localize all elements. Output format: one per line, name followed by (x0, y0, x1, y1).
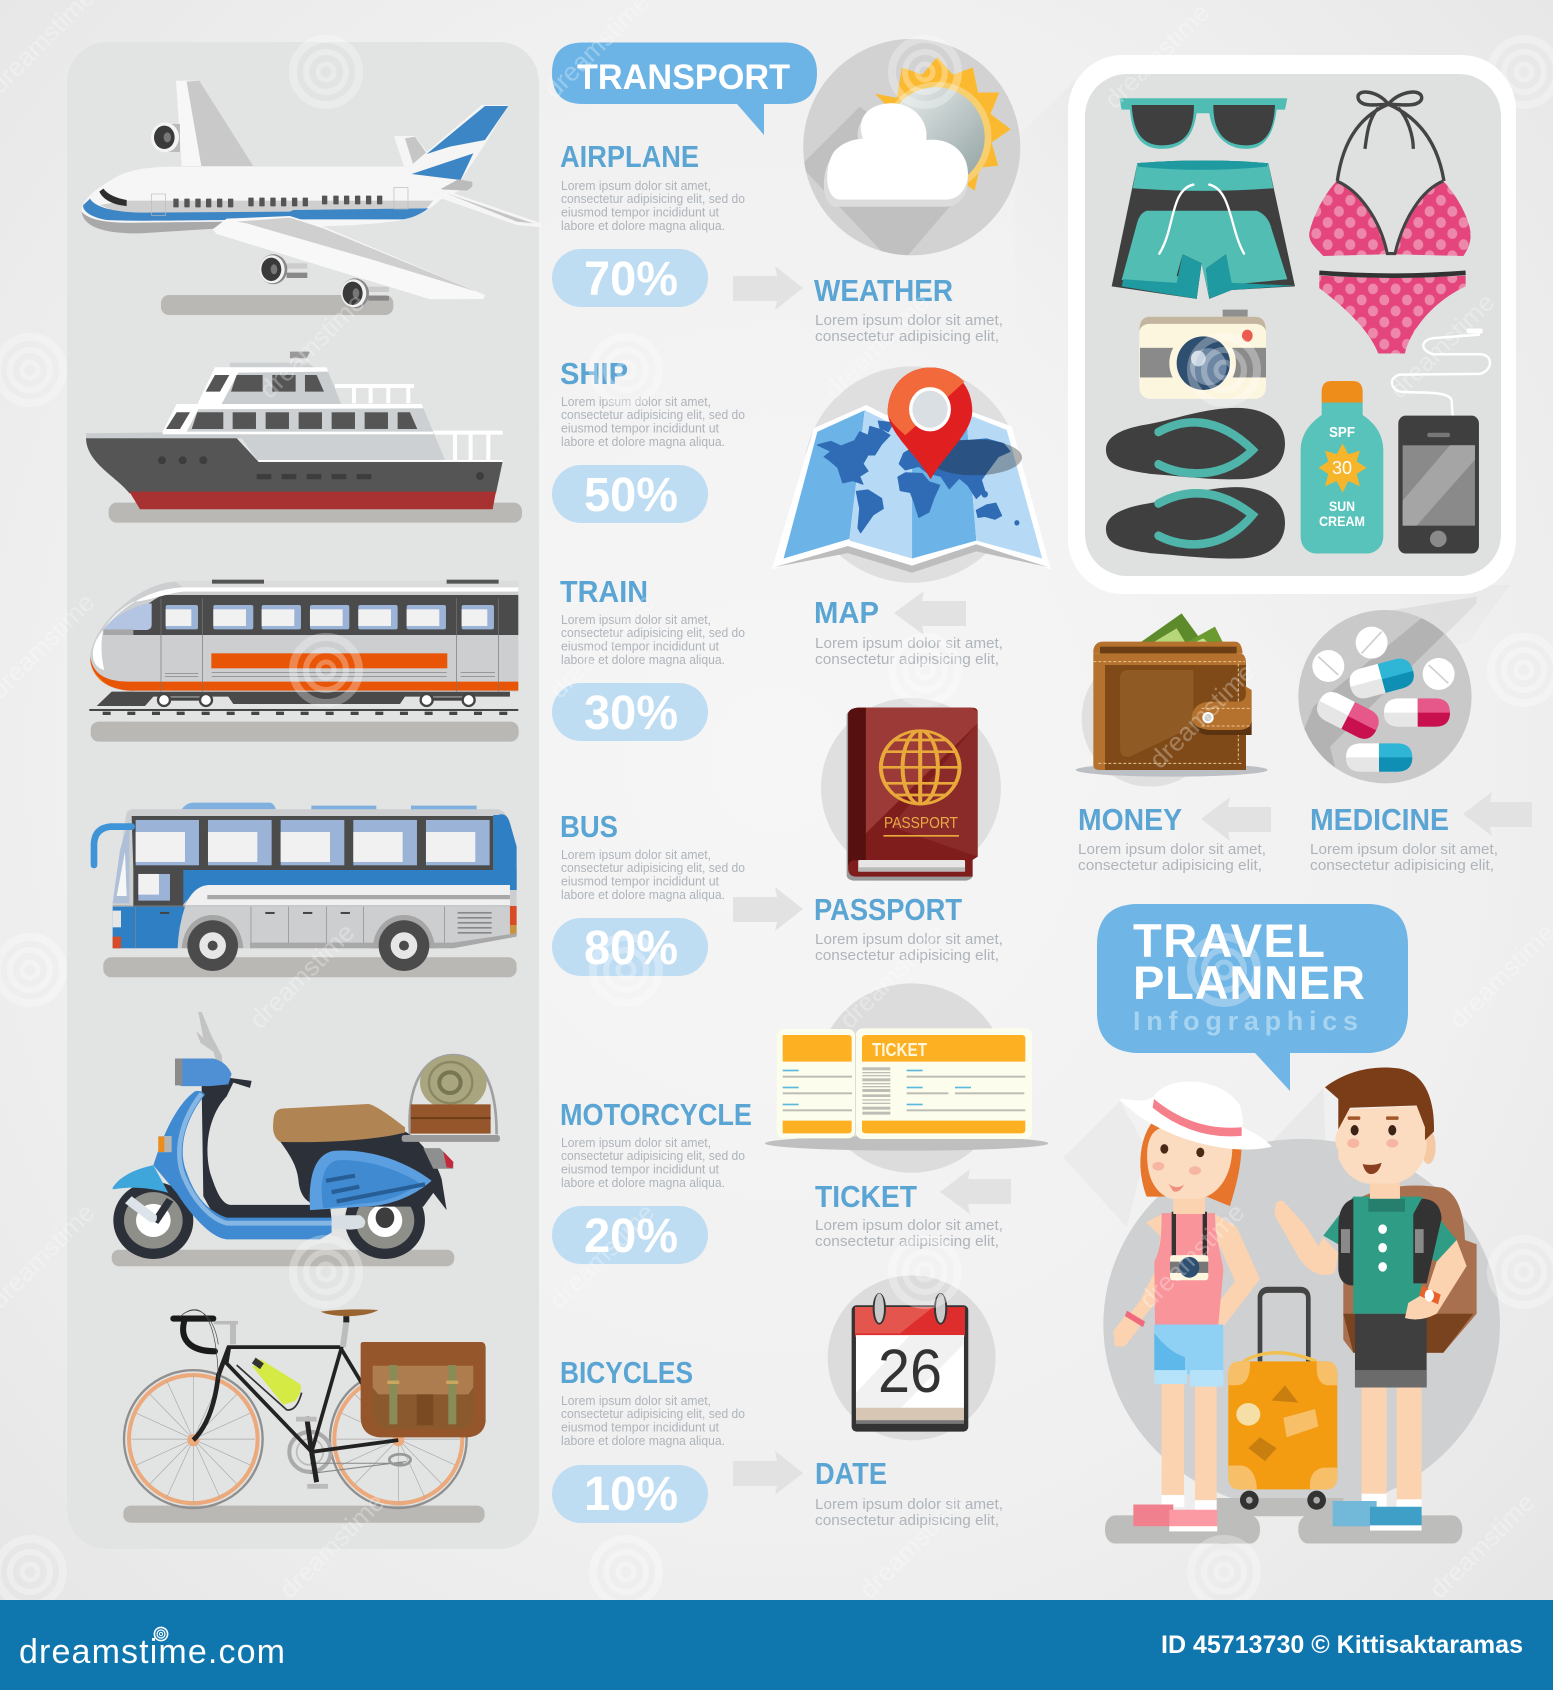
transport item: bicycles text: Lorem ipsum dolor sit amet, (561, 1394, 711, 1408)
label: medicine: MEDICINE (1310, 802, 1449, 837)
transport item: ship text: eiusmod tempor incididunt ut (561, 422, 720, 436)
transport item: ship text: labore et dolore magna aliqua. (561, 435, 725, 449)
watermark text: dreamstime (818, 287, 935, 404)
icon: map (772, 366, 1051, 583)
long shadow: packing box (1015, 80, 1510, 700)
transport item: train text: TRAIN (560, 574, 648, 609)
transport item: train text: eiusmod tempor incididunt ut (561, 640, 720, 654)
title: travel planner bubble: TRAVEL (1133, 914, 1325, 967)
transport item: bicycles text: consectetur adipisicing elit, sed do (561, 1407, 745, 1421)
vehicle: airplane (82, 81, 542, 315)
transport item: train text: Lorem ipsum dolor sit amet, (561, 613, 711, 627)
transport item: bus text: labore et dolore magna aliqua. (561, 888, 725, 902)
transport item: motorcycle text: 20% (584, 1210, 678, 1263)
label: medicine: consectetur adipisicing elit, (1310, 857, 1494, 874)
watermark text: dreamstime (1423, 1487, 1540, 1604)
item: sun cream: SUN (1329, 498, 1355, 514)
item: camera (1139, 310, 1266, 399)
title: travel planner bubble (1097, 904, 1408, 1091)
label: money: Lorem ipsum dolor sit amet, (1078, 841, 1266, 858)
transport item: bus text (552, 809, 745, 976)
transport item: bus text: BUS (560, 809, 618, 844)
transport item: train text: labore et dolore magna aliqua. (561, 653, 725, 667)
arrow: airplane to weather (733, 266, 803, 310)
illustration: travelers (1063, 1068, 1500, 1544)
watermark text: dreamstime (543, 1197, 660, 1314)
transport item: motorcycle text (552, 1097, 752, 1264)
item: sun cream: SPF (1329, 424, 1355, 441)
object: suitcase (1228, 1290, 1337, 1510)
watermark text: dreamstime (853, 1487, 970, 1604)
item: sunglasses (1119, 98, 1287, 149)
transport item: airplane text: AIRPLANE (560, 139, 699, 174)
label: ticket: Lorem ipsum dolor sit amet, (815, 1217, 1003, 1234)
watermark text: dreamstime (1133, 1197, 1250, 1314)
transport item: bicycles text: BICYCLES (560, 1355, 693, 1390)
transport item: ship text: SHIP (560, 356, 628, 391)
vehicle: ship (86, 352, 522, 523)
label: ticket: consectetur adipisicing elit, (815, 1233, 999, 1250)
transport item: airplane text: labore et dolore magna aliqua. (561, 219, 725, 233)
icon: calendar date (828, 1275, 996, 1440)
transport item: bicycles text: eiusmod tempor incididunt ut (561, 1420, 720, 1434)
transport item: airplane text (552, 139, 745, 307)
item: sun cream (1301, 381, 1383, 554)
label: ticket: TICKET (815, 1179, 917, 1214)
footer banner (0, 1600, 1553, 1690)
watermark text: dreamstime (1383, 287, 1500, 404)
transport item: airplane text: eiusmod tempor incididunt ut (561, 206, 720, 220)
transport item: motorcycle text: MOTORCYCLE (560, 1097, 752, 1132)
arrow: ticket (940, 1169, 1011, 1214)
icon: calendar date: 26 (878, 1337, 942, 1405)
icon: passport (821, 698, 1001, 881)
label: medicine (1310, 802, 1498, 874)
icon: passport: PASSPORT (884, 815, 958, 832)
label: medicine: Lorem ipsum dolor sit amet, (1310, 841, 1498, 858)
item: bikini (1309, 92, 1471, 354)
transport item: airplane text: 70% (584, 253, 678, 306)
footer banner: ID 45713730 © Kittisaktaramas (1161, 1631, 1523, 1659)
icon: ticket (765, 983, 1048, 1173)
item: phone (1392, 329, 1490, 554)
label: passport: consectetur adipisicing elit, (815, 947, 999, 964)
watermark text: dreamstime (833, 917, 950, 1034)
label: date: consectetur adipisicing elit, (815, 1512, 999, 1529)
item: flip flops (1106, 408, 1285, 559)
watermark text: dreamstime (273, 1487, 390, 1604)
label: ticket (815, 1179, 1003, 1250)
transport item: bus text: eiusmod tempor incididunt ut (561, 874, 720, 888)
character: man (1275, 1068, 1477, 1531)
label: date (815, 1456, 1003, 1529)
arrow: bicycles to date (733, 1451, 803, 1495)
label: money: consectetur adipisicing elit, (1078, 857, 1262, 874)
transport item: ship text: consectetur adipisicing elit, sed do (561, 408, 745, 422)
label: passport (814, 892, 1003, 964)
heading: transport bubble (552, 42, 817, 135)
transport item: train text: consectetur adipisicing elit, sed do (561, 626, 745, 640)
title: travel planner bubble: Infographics (1133, 1006, 1358, 1036)
transport item: ship text (552, 356, 745, 523)
transport item: bus text: Lorem ipsum dolor sit amet, (561, 848, 711, 862)
watermark text: dreamstime (1143, 657, 1260, 774)
label: date: DATE (815, 1456, 887, 1491)
title: travel planner bubble: PLANNER (1133, 956, 1365, 1009)
watermark text: dreamstime (543, 587, 660, 704)
vehicle: bus (94, 803, 517, 977)
label: date: Lorem ipsum dolor sit amet, (815, 1496, 1003, 1513)
item: sun cream: CREAM (1319, 513, 1365, 529)
footer banner: dreamstime.com (19, 1633, 285, 1671)
transport item: train text: 30% (584, 687, 678, 740)
panel: packing list box (1068, 55, 1516, 594)
label: weather: WEATHER (814, 273, 953, 308)
panel: transport vehicles (67, 42, 539, 1549)
transport item: bicycles text: labore et dolore magna aliqua. (561, 1434, 725, 1448)
label: map: MAP (814, 595, 879, 630)
item: sun cream: 30 (1332, 458, 1352, 478)
transport item: airplane text: Lorem ipsum dolor sit amet, (561, 179, 711, 193)
label: map: Lorem ipsum dolor sit amet, (815, 635, 1003, 652)
watermark text: dreamstime (253, 287, 370, 404)
watermark text: dreamstime (243, 917, 360, 1034)
transport item: motorcycle text: consectetur adipisicing elit, sed do (561, 1149, 745, 1163)
transport item: motorcycle text: Lorem ipsum dolor sit amet, (561, 1136, 711, 1150)
label: passport: PASSPORT (814, 892, 962, 927)
label: map (814, 595, 1003, 668)
icon: medicine (1298, 597, 1477, 787)
watermark text: dreamstime (1098, 0, 1215, 114)
transport item: motorcycle text: eiusmod tempor incididunt ut (561, 1162, 720, 1176)
item: swim shorts (1112, 161, 1295, 299)
transport item: bus text: 80% (584, 922, 678, 975)
transport item: ship text: 50% (584, 469, 678, 522)
transport item: bus text: consectetur adipisicing elit, sed do (561, 861, 745, 875)
vehicle: bicycle (123, 1309, 486, 1523)
icon: weather (800, 39, 1020, 259)
transport item: airplane text: consectetur adipisicing elit, sed do (561, 192, 745, 206)
label: weather: Lorem ipsum dolor sit amet, (815, 312, 1003, 329)
heading: transport bubble: TRANSPORT (577, 58, 790, 97)
transport item: bicycles text: 10% (584, 1468, 678, 1521)
arrow: bus to passport (733, 887, 803, 931)
vehicle: motorcycle (112, 1012, 500, 1266)
character: woman (1113, 1082, 1272, 1531)
transport item: train text (552, 574, 745, 741)
label: map: consectetur adipisicing elit, (815, 651, 999, 668)
transport item: motorcycle text: labore et dolore magna aliqua. (561, 1176, 725, 1190)
label: weather (814, 273, 1003, 345)
transport item: ship text: Lorem ipsum dolor sit amet, (561, 395, 711, 409)
label: weather: consectetur adipisicing elit, (815, 328, 999, 345)
icon: wallet (1076, 613, 1268, 787)
label: passport: Lorem ipsum dolor sit amet, (815, 931, 1003, 948)
arrow: money (1201, 797, 1271, 841)
arrow: medicine (1463, 792, 1532, 836)
vehicle: train (89, 580, 519, 742)
arrow: map (894, 591, 966, 635)
icon: ticket: TICKET (872, 1040, 927, 1060)
transport item: bicycles text (552, 1355, 745, 1523)
label: money: MONEY (1078, 802, 1182, 837)
label: money (1078, 802, 1266, 874)
